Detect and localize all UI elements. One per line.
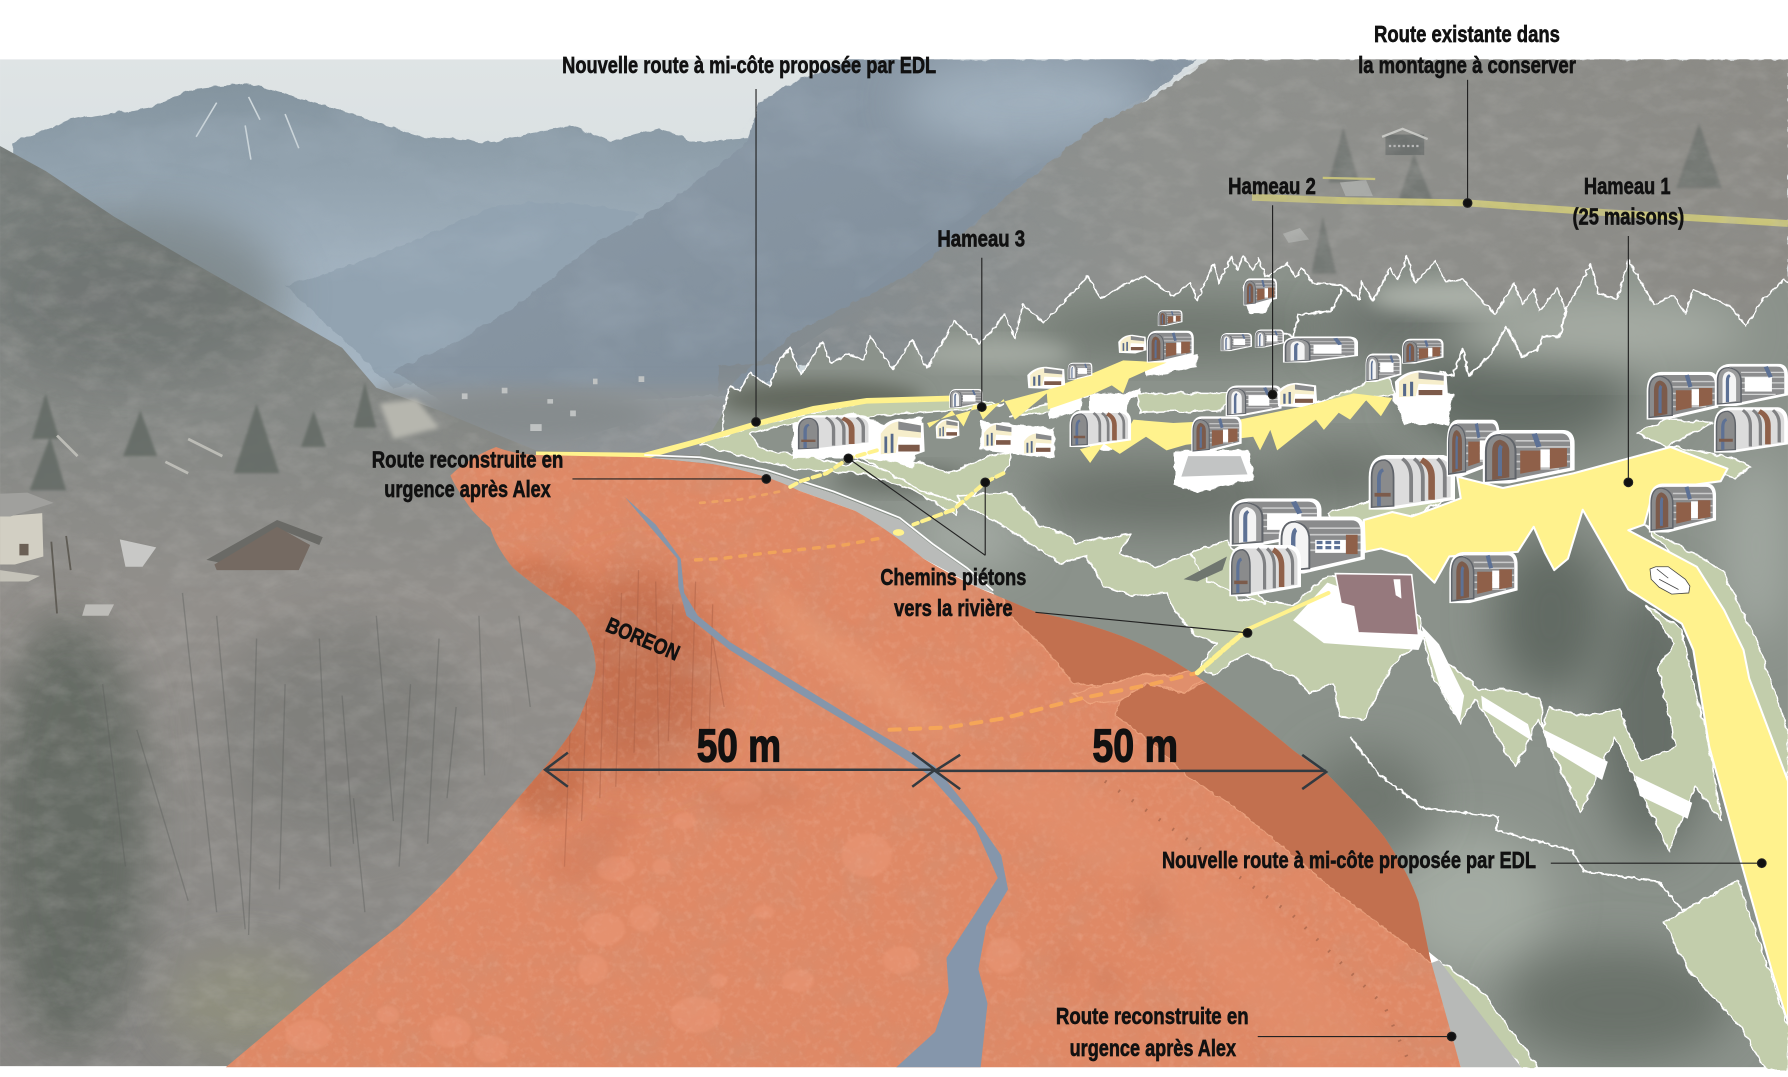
texture: far mountains — [536, 130, 546, 132]
label: rebuilt road bottom: Route reconstruite en — [1056, 1003, 1249, 1029]
label: hameau 1 — [1572, 173, 1684, 230]
hamlet 1 houses — [1229, 364, 1788, 603]
zone fill over rocks — [226, 447, 1461, 1067]
middle range — [286, 224, 627, 388]
label: hameau 2: Hameau 2 — [1228, 173, 1316, 199]
label: rebuilt road bottom — [1056, 1003, 1249, 1061]
white strips lower road — [1421, 625, 1692, 819]
boulders — [285, 781, 1022, 1063]
light ridge strip — [1073, 670, 1206, 704]
leader: footpaths — [844, 454, 990, 555]
path yellow to house — [1197, 629, 1247, 673]
label: Boreon river: BOREON — [602, 612, 684, 665]
red 50 m zone — [217, 445, 1482, 1072]
dark zone over hillside — [1000, 587, 1482, 1003]
left mountain and forest — [0, 146, 730, 1067]
label: footpaths — [880, 564, 1026, 621]
arrow: right 50 m — [935, 755, 1326, 789]
hillside base with shading — [696, 251, 1788, 1072]
dark hole in green band — [1184, 556, 1227, 582]
leader: rebuilt road bottom — [1258, 1032, 1456, 1041]
solid yellow to house — [1247, 593, 1328, 629]
valley floor — [376, 388, 741, 479]
leader: existing road — [1463, 80, 1472, 207]
illustrated hillside with hamlets — [536, 251, 1788, 1072]
leader lines and dots — [572, 80, 1766, 1041]
leader: hameau 2 — [1268, 205, 1277, 399]
bare tree trunks — [103, 593, 530, 935]
path yellow middle — [913, 473, 1003, 525]
label: existing road: la montagne à conserver — [1358, 52, 1576, 78]
leader: new road right — [1551, 859, 1766, 868]
label: rebuilt road bottom: urgence après Alex — [1070, 1035, 1236, 1061]
guard rail — [1105, 781, 1413, 1071]
large house with white base — [1293, 574, 1425, 650]
label: existing road — [1358, 21, 1576, 78]
dashed pedestrian paths — [696, 450, 1328, 730]
white ground under hamlets — [793, 285, 1454, 493]
far mountain with snow streaks — [14, 83, 798, 411]
label: 50 m left: 50 m — [697, 720, 781, 772]
yellow main road — [536, 396, 950, 458]
label: rebuilt road top — [372, 447, 563, 502]
sky — [0, 59, 1788, 401]
yellow hamlet 3 road — [927, 360, 1167, 428]
label: hameau 1: (25 maisons) — [1572, 204, 1684, 230]
existing road in the mountain — [1252, 178, 1788, 223]
green hillside bands — [700, 367, 1788, 1071]
hamlet 2 houses — [1070, 336, 1448, 477]
label: new road right: Nouvelle route à mi-côte proposée par EDL — [1162, 847, 1536, 873]
label: footpaths: Chemins piétons — [880, 564, 1026, 590]
path yellow upper — [790, 450, 877, 487]
car — [1650, 567, 1690, 594]
zone shading and texture — [217, 445, 1482, 1072]
leader: rebuilt road top — [572, 475, 771, 483]
road surface — [935, 770, 1414, 1067]
label: existing road: Route existante dans — [1374, 21, 1560, 47]
emergency rebuilt road (grey) — [644, 455, 1521, 1067]
hamlet 3 houses — [796, 278, 1284, 458]
right mountain slope — [718, 59, 1788, 393]
leader: footpath to house — [1035, 612, 1252, 637]
leader: new road top — [752, 89, 760, 426]
path orange faint — [700, 491, 780, 503]
dark trees on slope — [1311, 123, 1722, 274]
arrow: left 50 m — [545, 753, 935, 787]
central mountain — [393, 59, 1197, 411]
leader: hameau 3 — [977, 258, 986, 411]
orange spot on road — [893, 529, 904, 536]
label: rebuilt road top: urgence après Alex — [384, 476, 551, 502]
forest dark zones — [0, 211, 468, 1055]
yellow hamlet 2 road — [1080, 393, 1392, 463]
building on slope — [1382, 129, 1428, 155]
valley conifers and left houses — [0, 382, 439, 616]
white contour lines of forest — [723, 257, 1788, 911]
trunks in the zone — [564, 570, 724, 867]
path lower orange — [889, 673, 1197, 730]
leader: hameau 1 — [1624, 236, 1633, 487]
label: footpaths: vers la rivière — [894, 595, 1013, 621]
label: hameau 3: Hameau 3 — [937, 225, 1025, 251]
label: new road top: Nouvelle route à mi-côte proposée par EDL — [562, 52, 936, 78]
label: hameau 1: Hameau 1 — [1584, 173, 1671, 199]
river Boréon — [625, 497, 1008, 1067]
label: rebuilt road top: Route reconstruite en — [372, 447, 563, 473]
haze on central mountain — [901, 57, 1152, 148]
valley village — [451, 376, 644, 431]
label: 50 m right: 50 m — [1092, 720, 1178, 772]
small houses on slope — [1283, 180, 1373, 243]
yellow hamlet 1 square and road — [1364, 447, 1788, 1023]
path upper orange — [696, 538, 880, 560]
